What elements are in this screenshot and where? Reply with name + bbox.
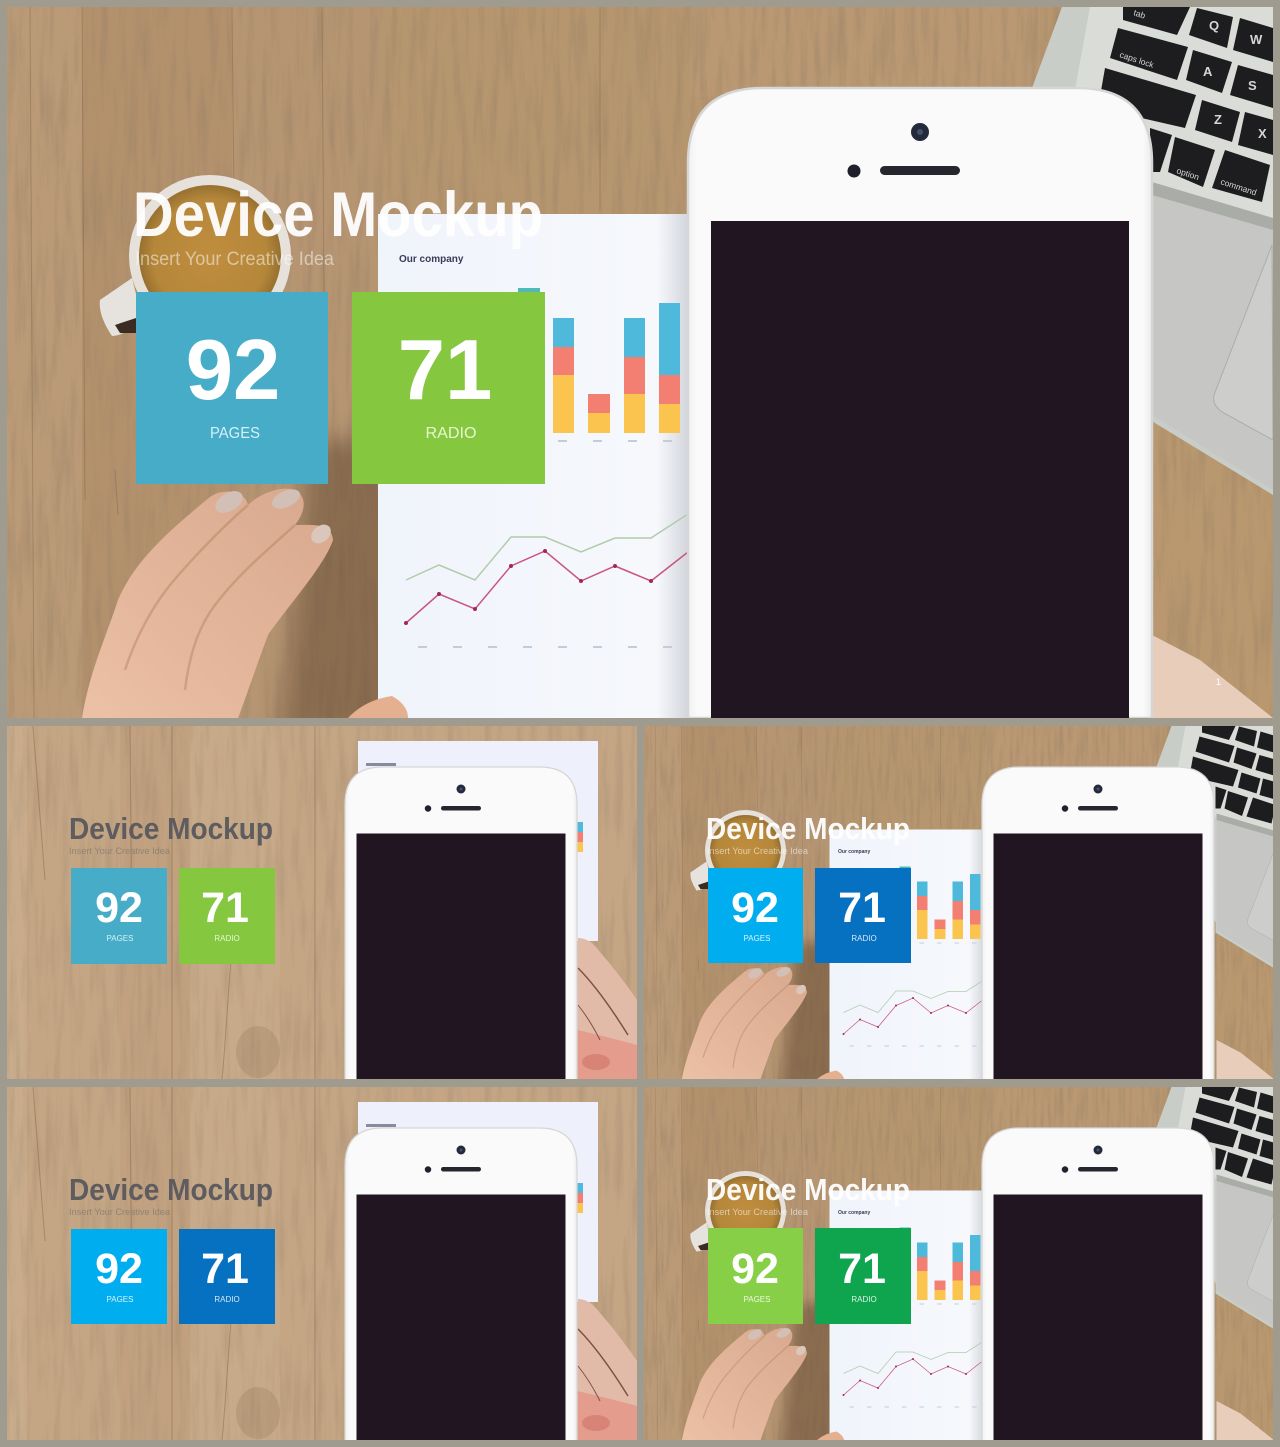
panel subtitle: Insert Your Creative Idea xyxy=(707,1207,809,1218)
stat card: radio xyxy=(815,1228,911,1324)
panel: variant blue with cup xyxy=(644,726,1277,1092)
stat card: radio: 71 xyxy=(838,884,886,932)
panel: main slide xyxy=(7,7,1273,740)
stat card: pages: 92 xyxy=(731,884,779,932)
keyboard labels: W xyxy=(1250,32,1263,47)
panel photo xyxy=(644,1087,1277,1447)
panel title: Device Mockup xyxy=(706,1172,910,1207)
stat card: radio: RADIO xyxy=(851,934,877,943)
keyboard labels xyxy=(1118,7,1267,198)
keyboard labels: S xyxy=(1248,78,1257,93)
panel subtitle: Insert Your Creative Idea xyxy=(707,846,809,857)
keyboard labels: command xyxy=(1219,176,1258,198)
stat card: pages: 92 xyxy=(95,884,143,932)
keyboard labels: A xyxy=(1203,64,1213,79)
stat card: pages: PAGES xyxy=(107,1295,133,1304)
stat card: pages xyxy=(71,868,167,964)
title: Device Mockup xyxy=(133,180,543,250)
keyboard labels: Q xyxy=(1209,18,1219,33)
stat card: radio xyxy=(179,1229,275,1324)
stat card: radio xyxy=(179,868,275,964)
stat card: pages: PAGES xyxy=(744,934,770,943)
panel subtitle: Insert Your Creative Idea xyxy=(69,846,171,857)
stat card: pages xyxy=(136,292,328,484)
stat card: pages xyxy=(708,1228,803,1324)
stat card: pages: PAGES xyxy=(107,934,133,943)
stat card: radio: 71 xyxy=(201,884,249,932)
panel photo: Our company xyxy=(838,1210,870,1216)
stat card: pages: 92 xyxy=(186,323,280,418)
stat card: pages xyxy=(71,1229,167,1324)
panel: variant blue on plain wood xyxy=(7,1087,637,1443)
phone mockup xyxy=(688,88,1152,718)
stat card: radio: RADIO xyxy=(214,1295,240,1304)
panel: variant green with cup xyxy=(644,1087,1277,1447)
panel subtitle: Insert Your Creative Idea xyxy=(69,1207,171,1218)
panel photo xyxy=(7,1087,637,1443)
panel photo xyxy=(644,726,1277,1092)
panel photo: Our company xyxy=(838,849,870,855)
keyboard labels: option xyxy=(1175,165,1201,182)
stat card: radio xyxy=(815,868,911,963)
keyboard labels: tab xyxy=(1132,7,1147,21)
desk photo xyxy=(7,7,1273,740)
stat card: pages: PAGES xyxy=(210,425,260,442)
stat card: pages: 92 xyxy=(731,1245,779,1293)
panel photo xyxy=(7,726,637,1082)
panel title: Device Mockup xyxy=(69,811,273,846)
stat card: pages: 92 xyxy=(95,1245,143,1293)
stat card: radio: RADIO xyxy=(214,934,240,943)
stat card: radio: 71 xyxy=(838,1245,886,1293)
panel title: Device Mockup xyxy=(69,1172,273,1207)
stat card: radio xyxy=(352,292,545,484)
subtitle: Insert Your Creative Idea xyxy=(135,249,334,270)
panel title: Device Mockup xyxy=(706,811,910,846)
stat card: radio: 71 xyxy=(201,1245,249,1293)
stat card: radio: 71 xyxy=(398,323,492,418)
stat card: radio: RADIO xyxy=(426,425,476,442)
keyboard labels: X xyxy=(1258,126,1267,141)
stat card: pages: PAGES xyxy=(744,1295,770,1304)
keyboard labels: caps lock xyxy=(1118,49,1156,70)
stat card: radio: RADIO xyxy=(851,1295,877,1304)
paper heading: Our company xyxy=(399,254,464,265)
panel: variant teal on plain wood xyxy=(7,726,637,1082)
keyboard labels: Z xyxy=(1214,112,1222,127)
page number: 1 xyxy=(1216,677,1221,687)
stat card: pages xyxy=(708,868,803,963)
